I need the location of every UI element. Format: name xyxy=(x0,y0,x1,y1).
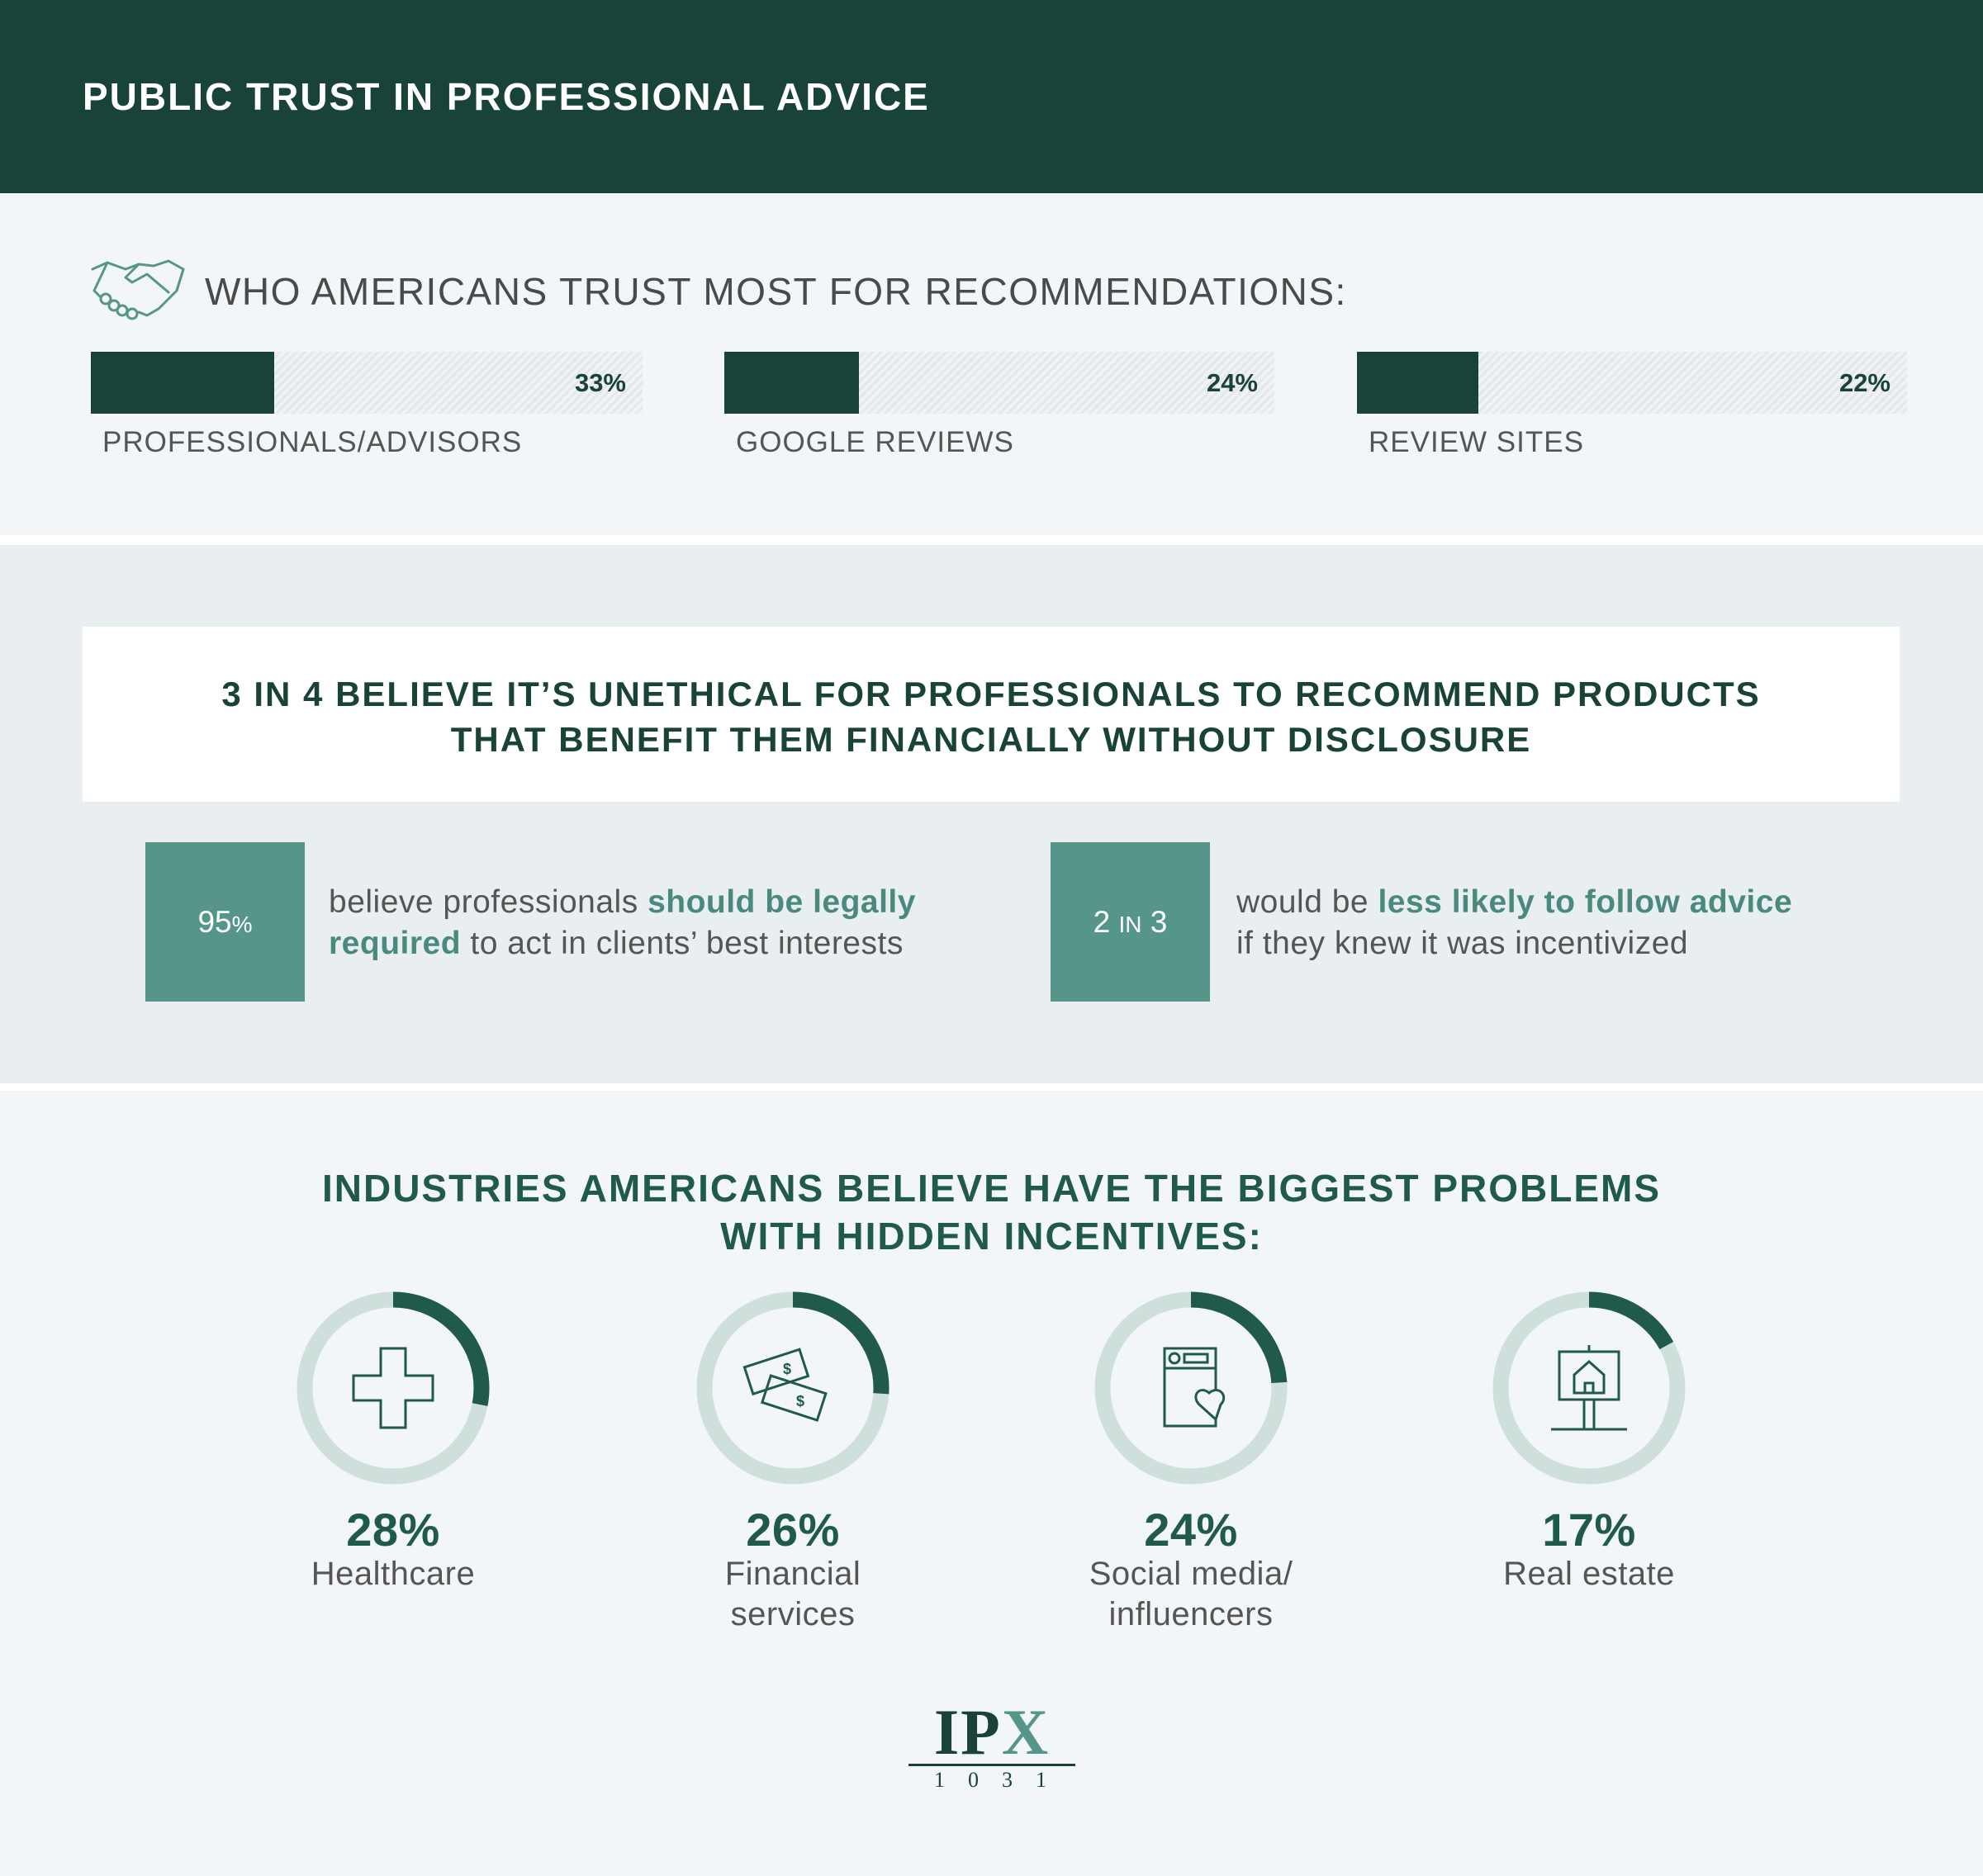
callout box: THAT BENEFIT THEM FINANCIALLY WITHOUT DISCLOSURE xyxy=(451,720,1531,759)
stat: 95% xyxy=(145,842,305,1002)
callout box xyxy=(83,627,1900,802)
panel: ethics xyxy=(0,545,1983,1083)
stat text xyxy=(1236,884,1792,961)
stat text: if they knew it was incentivized xyxy=(1236,926,1688,961)
donut: financial xyxy=(704,1300,881,1476)
label: healthcare xyxy=(311,1504,475,1592)
callout box: 3 IN 4 BELIEVE IT’S UNETHICAL FOR PROFESSIONALS TO RECOMMEND PRODUCTS xyxy=(221,675,1761,713)
donut: financial: $ xyxy=(783,1361,791,1377)
bar: review sites: 22% xyxy=(1839,368,1890,397)
header xyxy=(0,0,1983,193)
stat text: required to act in clients’ best interests xyxy=(329,926,904,961)
label: healthcare: 28% xyxy=(346,1504,440,1556)
bar: google xyxy=(724,352,1274,414)
logo: IPX xyxy=(934,1696,1050,1768)
bar label: PROFESSIONALS/ADVISORS xyxy=(102,426,522,458)
stat text: would be less likely to follow advice xyxy=(1236,884,1792,920)
panel: industries heading: WITH HIDDEN INCENTIVES: xyxy=(720,1215,1263,1258)
label: financial: Financial xyxy=(725,1556,861,1592)
donut charts xyxy=(297,1291,1685,1485)
stat: 2 in 3 xyxy=(1051,842,1210,1002)
icon: handshake xyxy=(91,259,185,320)
bar: review sites xyxy=(1357,352,1907,414)
label: social xyxy=(1089,1504,1293,1632)
donut: healthcare xyxy=(305,1300,482,1476)
panel: trust recommendations xyxy=(0,193,1983,535)
stat: 2 in 3: 2 IN 3 xyxy=(1093,905,1167,939)
bar label: REVIEW SITES xyxy=(1369,426,1584,458)
panel: industries heading: INDUSTRIES AMERICANS BELIEVE HAVE THE BIGGEST PROBLEMS xyxy=(322,1167,1661,1210)
bar: professionals: 33% xyxy=(575,368,626,397)
label: real estate: 17% xyxy=(1542,1504,1636,1556)
logo xyxy=(908,1696,1075,1792)
label: financial: 26% xyxy=(746,1504,840,1556)
donut: financial: $ xyxy=(796,1393,804,1409)
logo: 1031 xyxy=(934,1768,1070,1792)
panel: industries heading xyxy=(322,1167,1661,1258)
bar label: GOOGLE REVIEWS xyxy=(736,426,1014,458)
bar: professionals xyxy=(91,352,643,414)
heading: WHO AMERICANS TRUST MOST FOR RECOMMENDATIONS: xyxy=(205,270,1347,313)
label: social: influencers xyxy=(1109,1596,1273,1632)
donut: social xyxy=(1103,1300,1279,1476)
stat text: believe professionals should be legally xyxy=(329,884,916,920)
label: healthcare: Healthcare xyxy=(311,1556,475,1592)
bar: google: 24% xyxy=(1207,368,1258,397)
stat: 95%: 95% xyxy=(197,905,253,939)
label: real estate: Real estate xyxy=(1503,1556,1675,1592)
label: financial: services xyxy=(731,1596,855,1632)
label: social: Social media/ xyxy=(1089,1556,1293,1592)
title: PUBLIC TRUST IN PROFESSIONAL ADVICE xyxy=(83,75,930,118)
label: real estate xyxy=(1503,1504,1675,1592)
label: financial xyxy=(725,1504,861,1632)
donut: real estate xyxy=(1501,1300,1677,1476)
stat text xyxy=(329,884,916,961)
label: social: 24% xyxy=(1144,1504,1238,1556)
